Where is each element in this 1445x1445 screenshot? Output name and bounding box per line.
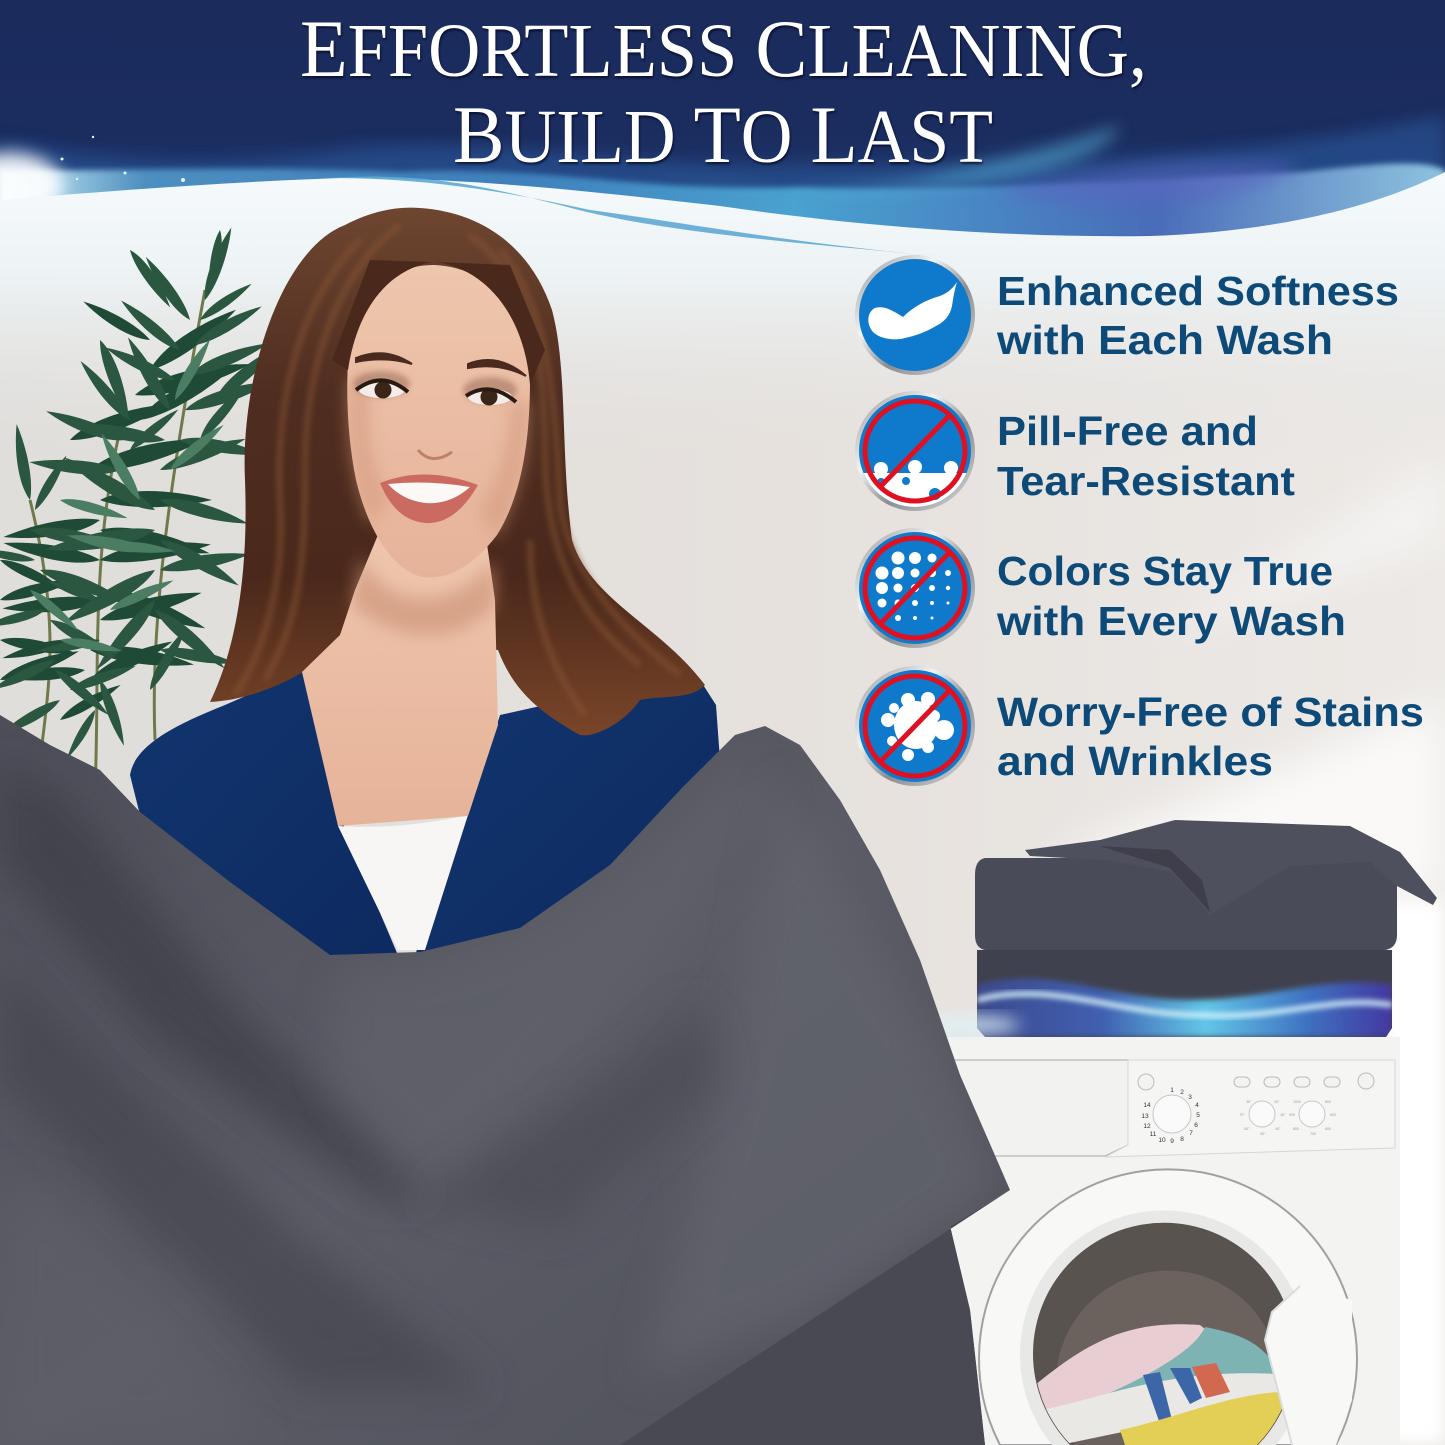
small dials: 800 (1325, 1100, 1331, 1104)
white top (338, 815, 468, 950)
title: EFFORTLESS CLEANING, (300, 3, 1147, 94)
feature: enhanced softness (855, 255, 1399, 375)
blanket (0, 715, 1010, 1445)
feature: pill-free: Tear-Resistant (997, 458, 1295, 504)
feature: stains and wrinkles (855, 666, 1424, 786)
main dial: 14 (1143, 1102, 1151, 1109)
small dials: 900 (1289, 1113, 1295, 1117)
small dials: 500 (1330, 1113, 1336, 1117)
control panel (1105, 1060, 1395, 1157)
title: BUILD TO LAST (453, 89, 993, 180)
icon: fading dots (855, 528, 975, 648)
main dial: 3 (1188, 1094, 1192, 1101)
hair (210, 208, 705, 735)
main dial: 5 (1196, 1112, 1200, 1119)
machine body (945, 1037, 1400, 1445)
lower fold (977, 950, 1392, 1037)
feature: colors stay true: Colors Stay True (997, 548, 1333, 594)
door handle (1265, 1286, 1352, 1445)
title (300, 3, 1147, 180)
small dials (1239, 1100, 1336, 1136)
feature: stains and wrinkles: Worry-Free of Stains (997, 689, 1424, 735)
main dial: 8 (1180, 1136, 1184, 1143)
small dials: 600 (1325, 1127, 1331, 1131)
main dial: 13 (1141, 1113, 1149, 1120)
eyes (359, 382, 405, 398)
main dial: 7 (1189, 1130, 1193, 1137)
hair strands (235, 225, 680, 715)
forehead hair (332, 260, 545, 385)
detergent drawer (945, 1060, 1128, 1156)
feature: enhanced softness: with Each Wash (996, 317, 1333, 363)
main dial: 6 (1194, 1122, 1198, 1129)
small dials: 700 (1310, 1132, 1316, 1136)
small dials: 1000 (1293, 1100, 1301, 1104)
feature: colors stay true: with Every Wash (996, 598, 1346, 644)
main dial: 1 (1170, 1087, 1174, 1094)
neck and chest (302, 530, 498, 826)
main dial: 10 (1158, 1137, 1166, 1144)
icon: stain splat (855, 666, 975, 786)
folded sheets (900, 820, 1437, 1037)
blue wave on fold (977, 979, 1392, 1037)
cardigan (130, 670, 400, 960)
main dial: 4 (1195, 1102, 1199, 1109)
white glow (900, 1015, 1020, 1035)
feature: pill-free: Pill-Free and (997, 408, 1258, 454)
small dials: 60° (1244, 1127, 1250, 1131)
small dials: 70° (1239, 1113, 1245, 1117)
main dial: 9 (1170, 1138, 1174, 1145)
eye shadow (354, 371, 410, 397)
upper fold (975, 858, 1397, 950)
buttons (1138, 1073, 1374, 1090)
draped sheet (1025, 820, 1437, 915)
icon: feather (855, 255, 975, 375)
feature: pill-free (855, 391, 1295, 511)
icon: no pills (855, 391, 975, 511)
washing machine (945, 1037, 1400, 1445)
main dial (1141, 1087, 1200, 1145)
main dial: 12 (1143, 1123, 1151, 1130)
nose (418, 450, 452, 459)
brows (356, 353, 412, 364)
main dial: 11 (1150, 1131, 1157, 1138)
blanket folds (0, 780, 978, 1388)
face (347, 265, 530, 578)
small dials: 30° (1280, 1113, 1286, 1117)
header wave (0, 0, 1445, 460)
feature: stains and wrinkles: and Wrinkles (997, 738, 1273, 784)
washer door (979, 1169, 1357, 1445)
small dials: 40° (1275, 1127, 1281, 1131)
feature: enhanced softness: Enhanced Softness (997, 268, 1399, 314)
light streaks on wall (1050, 460, 1445, 1445)
small dials: 90° (1246, 1100, 1252, 1104)
sparkles (60, 136, 185, 182)
mouth (380, 474, 478, 523)
feature: colors stay true (855, 528, 1346, 648)
plant (0, 226, 606, 790)
woman (130, 208, 720, 960)
laundry inside drum (1030, 1271, 1290, 1445)
small dials: 20° (1274, 1100, 1280, 1104)
small dials: 800 (1293, 1127, 1299, 1131)
main dial: 2 (1180, 1089, 1184, 1096)
small dials: 50° (1260, 1132, 1266, 1136)
